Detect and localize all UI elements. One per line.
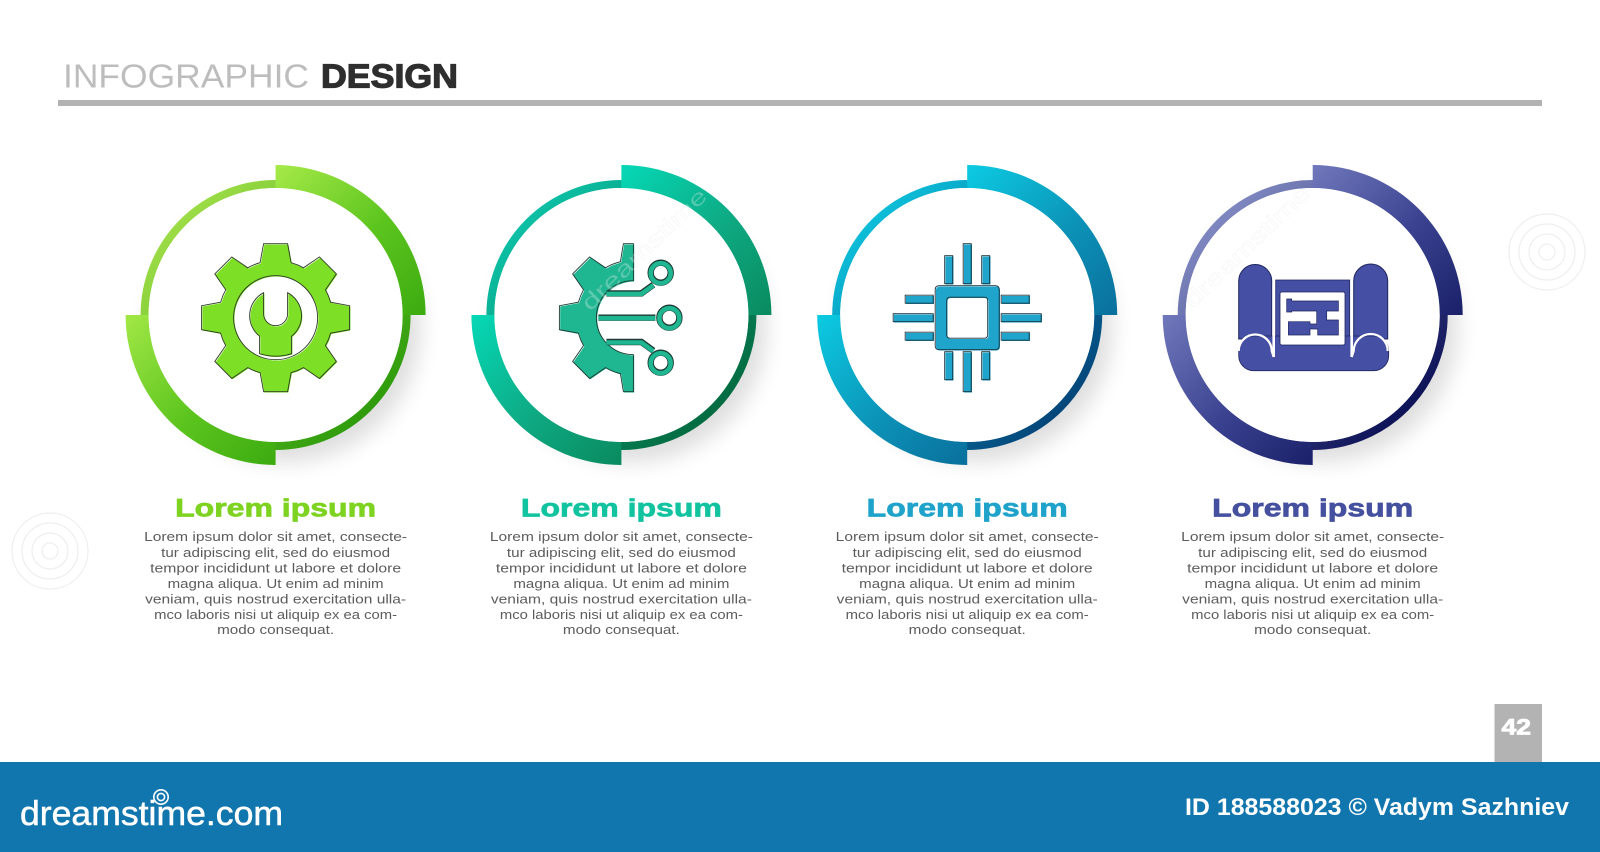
icon: processor chip (893, 244, 1042, 392)
ring 2 (471, 165, 771, 465)
text block 2: tur adipiscing elit, sed do eiusmod (507, 545, 736, 560)
text block 1 (144, 529, 407, 637)
page number box: 42 (1502, 714, 1531, 739)
watermark text: dreamstime (576, 183, 712, 316)
text block 1: tempor incididunt ut labore et dolore (150, 560, 401, 576)
text block 4: Lorem ipsum dolor sit amet, consecte- (1181, 529, 1444, 544)
text block 3: tempor incididunt ut labore et dolore (842, 560, 1093, 576)
text block 1: mco laboris nisi ut aliquip ex ea com- (154, 607, 397, 622)
panel: step 4 blueprint (1163, 165, 1463, 637)
footer band (0, 762, 1600, 852)
text block 3 (836, 529, 1099, 637)
icon: blueprint scroll (1239, 264, 1389, 371)
text block 3: Lorem ipsum dolor sit amet, consecte- (836, 529, 1099, 544)
title: DESIGN (321, 58, 458, 94)
text block 3: tur adipiscing elit, sed do eiusmod (853, 545, 1082, 560)
panel: step 3 processor (817, 165, 1117, 637)
text block 3: mco laboris nisi ut aliquip ex ea com- (846, 607, 1089, 622)
heading 2: Lorem ipsum (521, 494, 722, 522)
text block 4: mco laboris nisi ut aliquip ex ea com- (1191, 607, 1434, 622)
text block 3: magna aliqua. Ut enim ad minim (859, 576, 1075, 591)
icon: logo spiral (154, 790, 168, 804)
text block 1: tur adipiscing elit, sed do eiusmod (161, 545, 390, 560)
heading 4: Lorem ipsum (1212, 494, 1413, 522)
heading 1: Lorem ipsum (175, 494, 376, 522)
text block 4: modo consequat. (1254, 622, 1371, 637)
panel: step 2 gear circuit (471, 165, 771, 637)
heading 3: Lorem ipsum (867, 494, 1068, 522)
footer logo text: dreamstime.com (20, 795, 283, 833)
text block 2 (490, 529, 753, 637)
text block 1: veniam, quis nostrud exercitation ulla- (145, 592, 406, 606)
ring 1 (126, 165, 426, 465)
text block 2: Lorem ipsum dolor sit amet, consecte- (490, 529, 753, 544)
icon: half gear with circuit traces (559, 244, 679, 392)
text block 2: tempor incididunt ut labore et dolore (496, 560, 747, 576)
text block 2: mco laboris nisi ut aliquip ex ea com- (500, 607, 743, 622)
text block 3: modo consequat. (909, 622, 1026, 637)
watermark text: dreamstime (1179, 180, 1315, 313)
title: INFOGRAPHIC (63, 58, 309, 94)
text block 1: Lorem ipsum dolor sit amet, consecte- (144, 529, 407, 544)
text block 3: veniam, quis nostrud exercitation ulla- (837, 592, 1098, 606)
watermark text (576, 180, 1315, 316)
text block 4 (1181, 529, 1444, 637)
icon: gear with wrench (202, 244, 350, 392)
ring 4 (1163, 165, 1463, 465)
text block 1: magna aliqua. Ut enim ad minim (168, 576, 384, 591)
watermark spirals (12, 214, 1585, 589)
text block 4: magna aliqua. Ut enim ad minim (1205, 576, 1421, 591)
text block 4: tur adipiscing elit, sed do eiusmod (1198, 545, 1427, 560)
text block 2: modo consequat. (563, 622, 680, 637)
panel: step 1 gear wrench (126, 165, 426, 637)
title (63, 58, 458, 94)
page number box (1494, 704, 1542, 762)
text block 4: veniam, quis nostrud exercitation ulla- (1182, 592, 1443, 606)
text block 1: modo consequat. (217, 622, 334, 637)
ring 3 (817, 165, 1117, 465)
text block 4: tempor incididunt ut labore et dolore (1187, 560, 1438, 576)
text block 2: veniam, quis nostrud exercitation ulla- (491, 592, 752, 606)
text block 2: magna aliqua. Ut enim ad minim (513, 576, 729, 591)
image id and author: ID 188588023 © Vadym Sazhniev (1185, 794, 1570, 821)
header rule (58, 100, 1542, 106)
